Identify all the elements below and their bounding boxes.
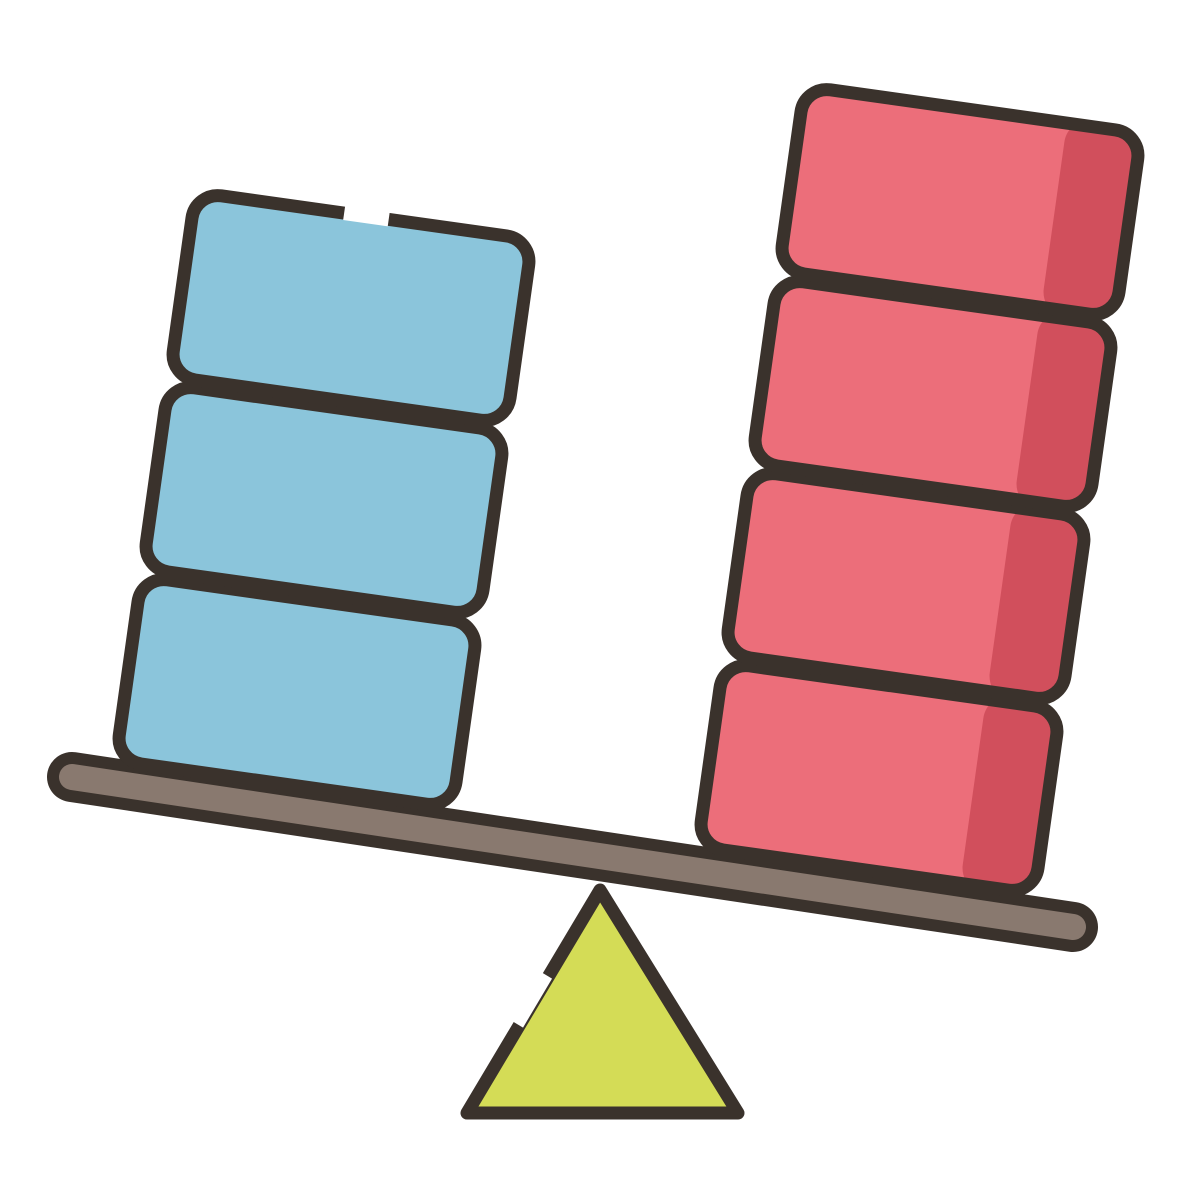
icon: fulcrum triangle [467, 890, 738, 1113]
icon: seesaw beam [72, 777, 1073, 927]
red block stack (heavier side) [697, 79, 1187, 907]
blue block stack (lighter side) [116, 192, 532, 808]
